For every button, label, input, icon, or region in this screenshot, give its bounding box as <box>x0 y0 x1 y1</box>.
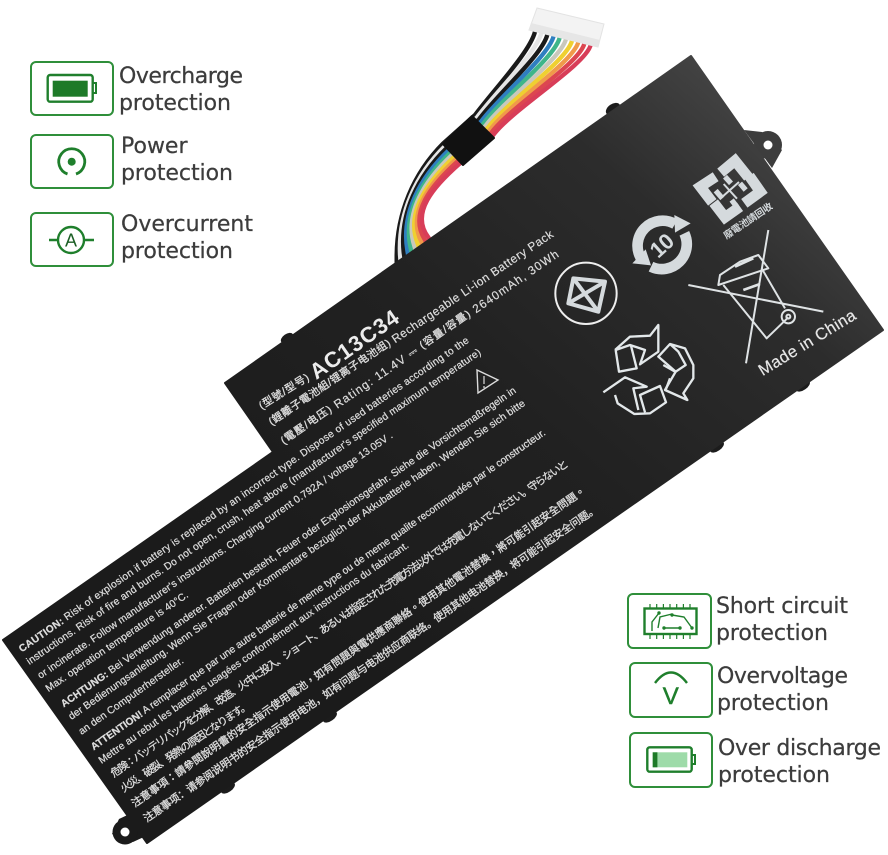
safety warning text block: 危険：バッテリパックを分解、改造、火中に投入、ショート、あるいは指定された充電方法以外では充電しないでください。守らないと <box>108 457 571 780</box>
feature: overvoltage protection: Overvoltage <box>717 664 848 689</box>
safety warning text block: ATTENTION! A remplacer que par une autre batterie de meme type ou de meme qualite recommandée par le constructeur. <box>89 428 548 753</box>
safety warning text block: der Bedienungsanleitung. Wenn Sie Fragen oder Kommentare bezüglich der Akkubatterie haben, Wenden Sie sich bitte <box>67 398 528 723</box>
label header text: AC13C34 <box>305 304 404 384</box>
warning triangle icon <box>477 370 498 393</box>
icon: voltmeter arc <box>655 672 687 710</box>
icon: full battery <box>48 75 96 102</box>
icon: battery recycling mark: 廢電池請回收 <box>721 200 775 242</box>
icon: ammeter: A <box>65 230 77 250</box>
feature: short circuit protection: Short circuit <box>716 594 848 619</box>
feature: overvoltage protection <box>630 663 848 717</box>
feature: overcharge protection <box>31 62 243 116</box>
battery certification marks <box>555 161 860 414</box>
safety warning text block: Max. operation temperature is 40°C. <box>44 590 191 695</box>
feature: overcurrent protection <box>31 212 253 266</box>
icon: power dot ring <box>59 149 85 174</box>
feature: power protection: Power <box>121 134 188 159</box>
safety warning text block: 注意事项：请参阅说明书的安全指示使用电池，如有问题与电池供应商联络。使用其他电池替换，将可能引起安全问题。 <box>141 502 600 825</box>
feature: overcharge protection: protection <box>119 91 231 116</box>
feature: overvoltage protection: protection <box>717 691 829 716</box>
made in China text: Made in China <box>755 306 860 380</box>
feature: overcharge protection: Overcharge <box>119 64 243 89</box>
edge nubs <box>219 100 812 796</box>
icon: mobius recycling arrows <box>603 325 693 414</box>
safety warning text block: 注意事項：請參閱說明書的安全指示使用電池，如有問題與電供應商聯絡。使用其他電池替換，將可能引起安全問題。 <box>129 484 588 810</box>
feature: over discharge protection: Over discharge <box>718 736 881 761</box>
icon: low battery <box>647 747 695 772</box>
safety warning text block <box>17 335 600 825</box>
icon: 10 year recycling ring <box>632 215 691 269</box>
safety warning text block: or incinerate. Follow manufacturer's instructions. Charging current 0.792A / voltage 13.05V . <box>36 430 395 682</box>
feature: overcurrent protection: protection <box>121 239 233 264</box>
icon: crossed-out wheelie bin <box>688 230 823 363</box>
feature: over discharge protection <box>630 733 881 788</box>
icon: ammeter <box>49 227 94 253</box>
safety warning text block: ACHTUNG: Bei Verwendung anderer. Batterien besteht, Feuer oder Explosionsgefahr. Siehe die Vorsichtsmaßregeln in <box>59 385 518 710</box>
mounting tab: top right <box>744 130 782 168</box>
feature: overcurrent protection: Overcurrent <box>121 212 253 237</box>
icon: battery recycling mark <box>700 161 775 242</box>
wire connector <box>529 8 604 47</box>
icon: circuit chip <box>644 604 696 639</box>
icon: triangle mark in circle <box>555 263 617 324</box>
wire harness <box>397 32 591 277</box>
feature: short circuit protection: protection <box>716 621 828 646</box>
icon: 10 year recycling ring: 10 <box>645 228 679 263</box>
mounting tab: bottom left <box>112 810 146 844</box>
safety warning text block: instructions. Risk of fire and burns. Do not open, crush, heat above (manufacturer's specified maximum temperature) <box>25 347 483 668</box>
safety warning text block: CAUTION: Risk of explosion if battery is replaced by an incorrect type. Dispose of used batteries according to the <box>17 335 472 655</box>
feature: over discharge protection: protection <box>718 763 830 788</box>
icon: voltmeter arc: V <box>663 683 679 710</box>
safety warning text block: Mettre au rebut les batteries usagées conformément aux instructions du fabricant. <box>97 540 411 766</box>
safety warning text block: an den Computerhersteller. <box>77 656 186 737</box>
label header text: (電壓/电压) Rating: 11.4V ⎓ (容量/容量) 2640mAh, 30Wh <box>278 247 561 448</box>
feature: short circuit protection <box>628 594 848 648</box>
label header text: (鋰離子電池組/锂离子电池组) Rechargeable Li-ion Battery Pack <box>266 227 556 429</box>
safety warning text block: 火災、破裂、発熱の原因となります。 <box>118 699 252 795</box>
feature: power protection: protection <box>121 161 233 186</box>
wire sleeve clamp <box>443 116 494 165</box>
label header text: (型號/型号) <box>256 371 312 412</box>
feature: power protection <box>31 134 233 188</box>
